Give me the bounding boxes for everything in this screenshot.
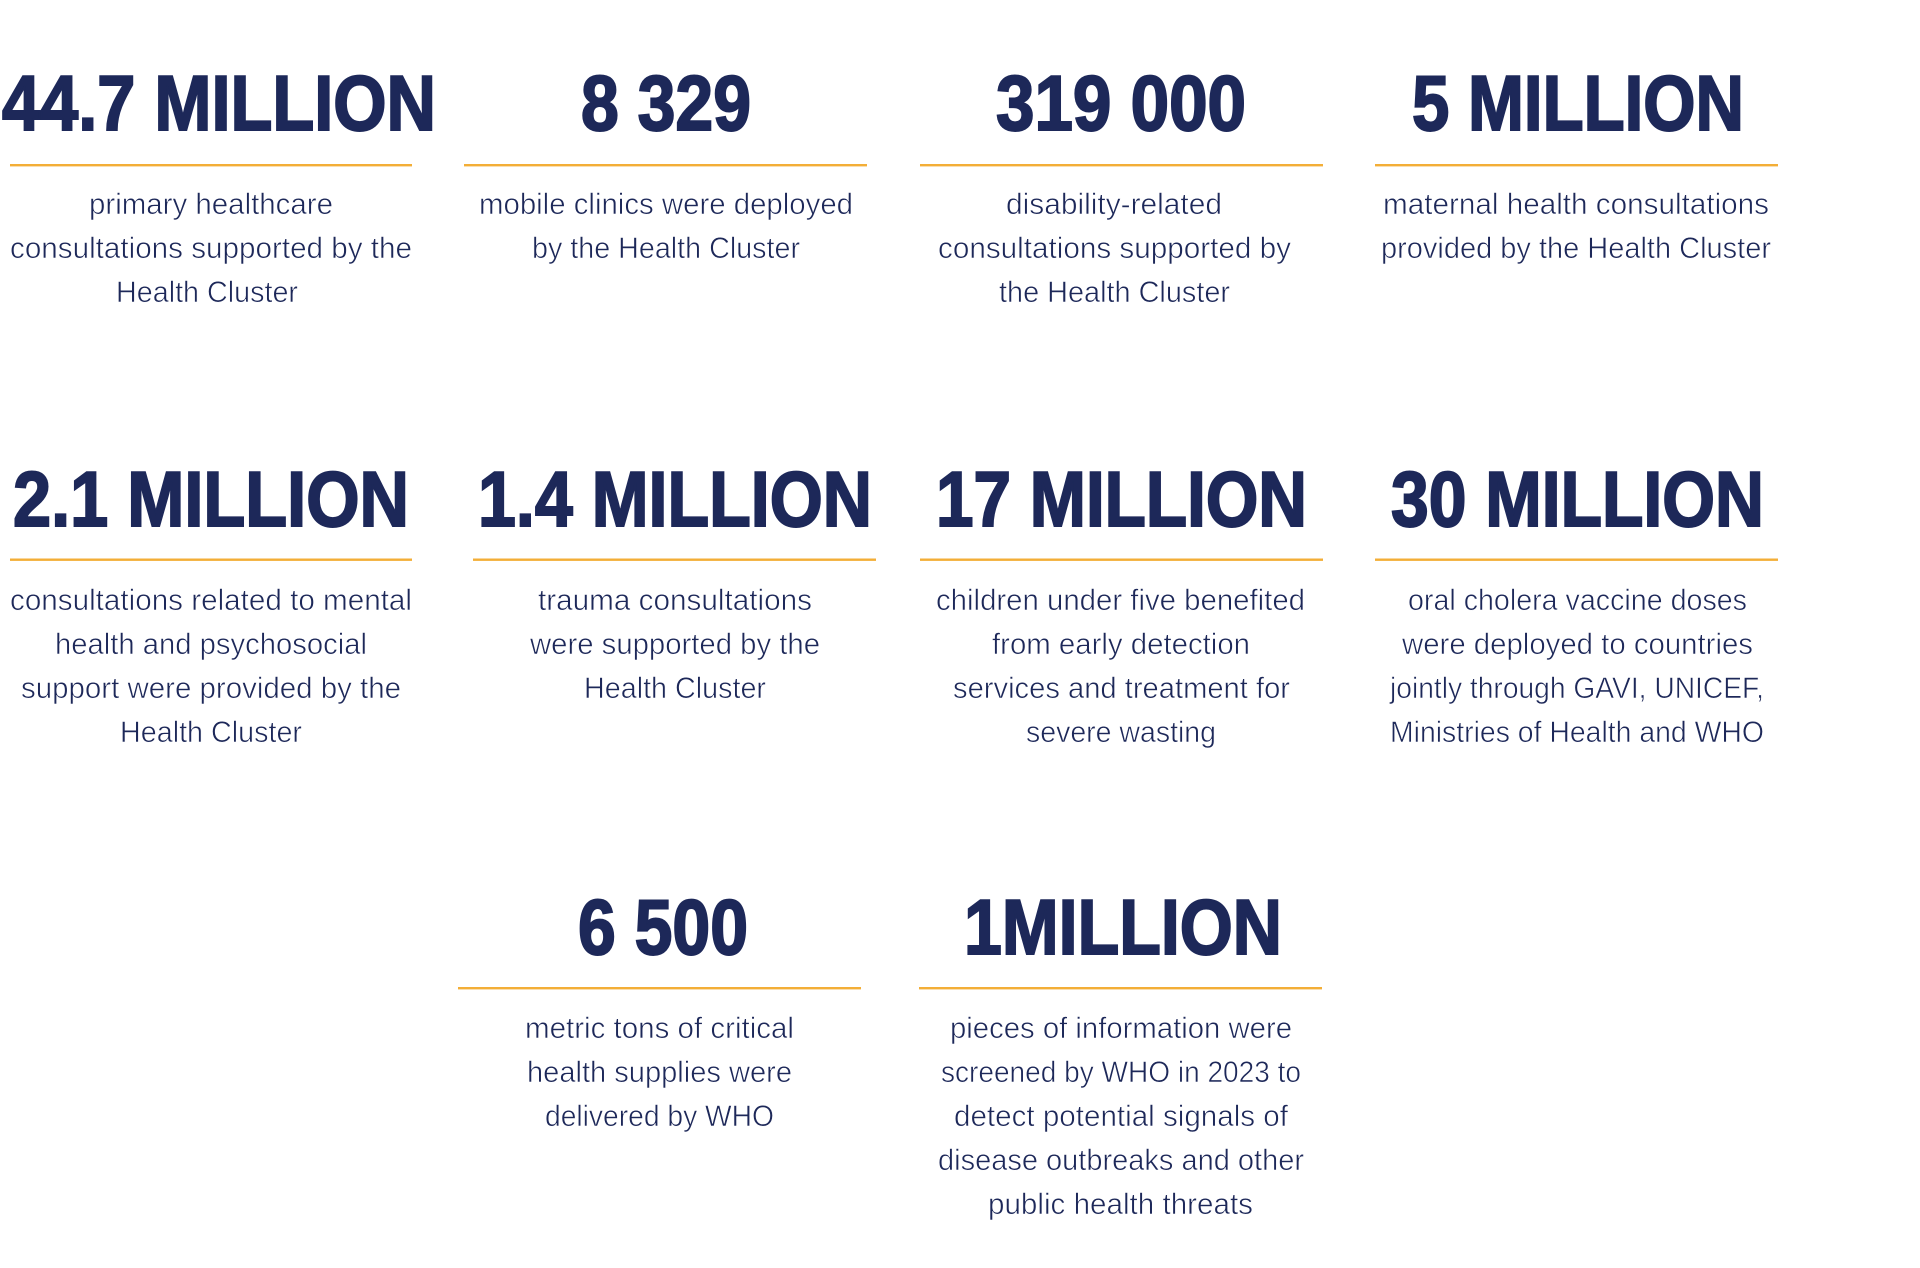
heading: 6 500: 6 500 bbox=[578, 883, 748, 971]
text block: trauma description: trauma consultations bbox=[538, 584, 812, 617]
text block: supplies description bbox=[525, 1012, 794, 1133]
text block: maternal health description bbox=[1381, 188, 1771, 265]
text block: trauma description: Health Cluster bbox=[584, 672, 766, 705]
text block: trauma description bbox=[529, 584, 820, 705]
heading: 319 000: 319 000 bbox=[996, 59, 1246, 147]
text block: primary healthcare description: Health Cluster bbox=[116, 276, 298, 309]
text block: information screening description: disease outbreaks and other bbox=[938, 1144, 1304, 1177]
text block: information screening description bbox=[938, 1012, 1304, 1221]
heading: 17 MILLION: 17 MILLION bbox=[936, 455, 1307, 543]
panel: 1.4 million trauma consultations bbox=[473, 455, 876, 705]
text block: mobile clinics description bbox=[479, 188, 853, 265]
panel: 2.1 million mental health consultations bbox=[10, 455, 412, 749]
text block: mental health description: support were provided by the bbox=[21, 672, 401, 705]
text block: mental health description: health and psychosocial bbox=[55, 628, 367, 661]
heading: 5 MILLION: 5 MILLION bbox=[1412, 59, 1744, 147]
text block: children description: severe wasting bbox=[1026, 716, 1216, 749]
panel: 30 million oral cholera vaccine doses bbox=[1375, 455, 1778, 749]
text block: primary healthcare description bbox=[10, 188, 412, 309]
text block: maternal health description: provided by the Health Cluster bbox=[1381, 232, 1771, 265]
panel: 319 000 disability-related consultations bbox=[920, 59, 1323, 309]
heading: 30 MILLION: 30 MILLION bbox=[1391, 455, 1764, 543]
text block: mobile clinics description: mobile clinics were deployed bbox=[479, 188, 853, 221]
text block: disability description: the Health Cluster bbox=[999, 276, 1230, 309]
text block: children description: services and treatment for bbox=[953, 672, 1290, 705]
text block: cholera vaccine description: were deployed to countries bbox=[1401, 628, 1753, 661]
panel: 6 500 metric tons of supplies bbox=[458, 883, 861, 1133]
text block: trauma description: were supported by the bbox=[529, 628, 820, 661]
text block: disability description bbox=[938, 188, 1291, 309]
panel: 17 million children under five bbox=[920, 455, 1323, 749]
heading: 2.1 MILLION: 2.1 MILLION bbox=[13, 455, 409, 543]
panel: 1 million pieces of information bbox=[919, 883, 1322, 1221]
text block: mental health description bbox=[10, 584, 412, 749]
panel: 8 329 mobile clinics bbox=[464, 59, 867, 265]
text block: children description: from early detection bbox=[992, 628, 1250, 661]
text block: mental health description: consultations related to mental bbox=[10, 584, 412, 617]
text block: mobile clinics description: by the Health Cluster bbox=[532, 232, 800, 265]
heading: 8 329: 8 329 bbox=[581, 59, 751, 147]
text block: children description bbox=[936, 584, 1305, 749]
text block: information screening description: pieces of information were bbox=[950, 1012, 1292, 1045]
heading: 44.7 MILLION: 44.7 MILLION bbox=[2, 59, 436, 147]
text block: supplies description: delivered by WHO bbox=[545, 1100, 774, 1133]
text block: maternal health description: maternal health consultations bbox=[1383, 188, 1769, 221]
panel: 44.7 million primary healthcare consultations bbox=[2, 59, 436, 309]
text block: information screening description: public health threats bbox=[988, 1188, 1253, 1221]
text block: disability description: consultations supported by bbox=[938, 232, 1291, 265]
heading: 1.4 MILLION: 1.4 MILLION bbox=[478, 455, 872, 543]
text block: information screening description: screened by WHO in 2023 to bbox=[941, 1056, 1301, 1089]
text block: primary healthcare description: consultations supported by the bbox=[10, 232, 412, 265]
text block: information screening description: detect potential signals of bbox=[954, 1100, 1289, 1133]
text block: cholera vaccine description: oral cholera vaccine doses bbox=[1408, 584, 1747, 617]
heading: 1MILLION: 1MILLION bbox=[964, 883, 1282, 971]
text block: children description: children under five benefited bbox=[936, 584, 1305, 617]
text block: supplies description: health supplies were bbox=[527, 1056, 792, 1089]
text block: disability description: disability-related bbox=[1006, 188, 1222, 221]
text block: mental health description: Health Cluster bbox=[120, 716, 302, 749]
text block: supplies description: metric tons of critical bbox=[525, 1012, 794, 1045]
text block: cholera vaccine description bbox=[1389, 584, 1764, 749]
text block: cholera vaccine description: Ministries of Health and WHO bbox=[1390, 716, 1764, 749]
panel: 5 million maternal health consultations bbox=[1375, 59, 1778, 265]
text block: cholera vaccine description: jointly through GAVI, UNICEF, bbox=[1389, 672, 1764, 705]
text block: primary healthcare description: primary healthcare bbox=[89, 188, 333, 221]
